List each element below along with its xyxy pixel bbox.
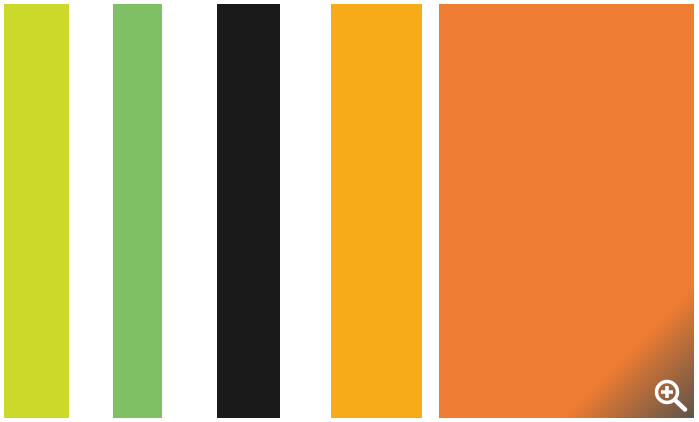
icon: magnifying glass (654, 380, 688, 412)
bar: green (112, 4, 162, 418)
bar: lime (4, 4, 69, 418)
bar: amber (331, 4, 422, 418)
zoom corner gradient (570, 294, 694, 418)
bar: black (217, 4, 280, 418)
bar: orange with corner shading (439, 4, 694, 418)
